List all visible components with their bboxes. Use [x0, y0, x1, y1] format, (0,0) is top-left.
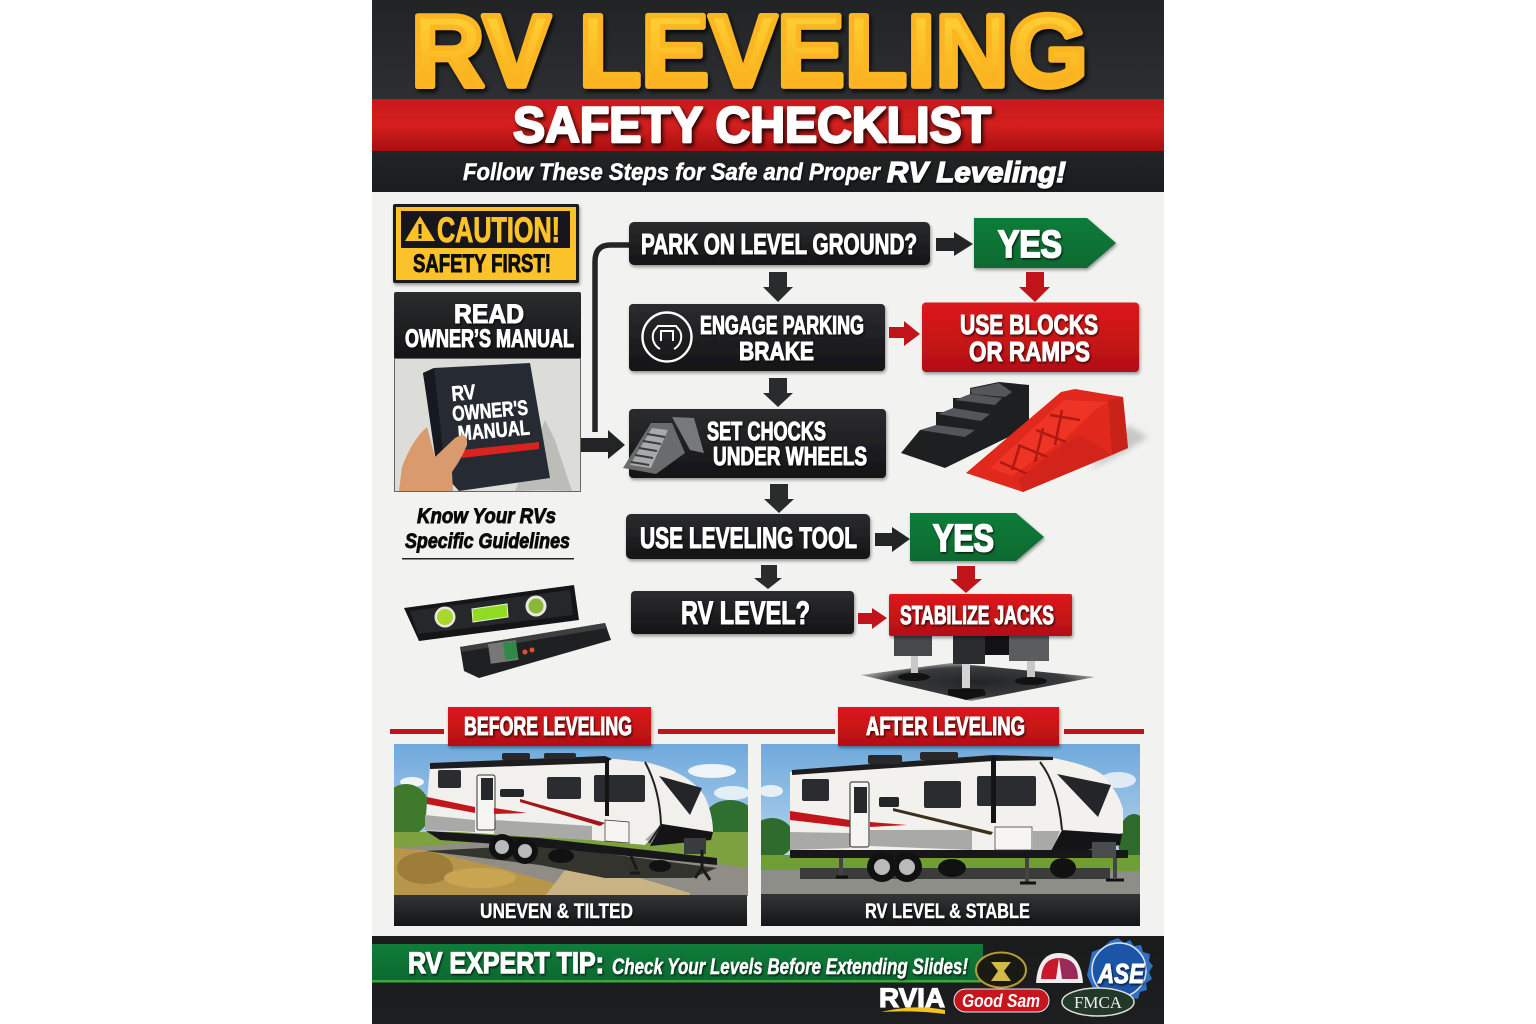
photo: scenery	[750, 744, 1150, 896]
step: use blocks or ramps	[922, 302, 1139, 372]
icon: manual book	[423, 363, 550, 491]
book title	[450, 377, 531, 446]
section rules	[390, 729, 1144, 734]
logo: FMCA	[1062, 988, 1134, 1016]
icon: hand	[399, 427, 467, 491]
guideline note	[402, 505, 574, 560]
label: after leveling	[838, 707, 1059, 746]
page background	[372, 190, 1164, 940]
logo: FMCA: FMCA	[1074, 993, 1123, 1012]
panel: after leveling	[750, 707, 1150, 926]
arrow: chocks down	[764, 484, 794, 513]
step: engage parking brake	[629, 304, 885, 371]
safety first text: SAFETY FIRST!	[413, 250, 551, 278]
step: engage parking brake: BRAKE	[739, 336, 814, 366]
icon: leveling blocks and ramp	[901, 382, 1148, 492]
badge: yes	[974, 218, 1116, 268]
connector: manual to flow	[581, 245, 630, 459]
red subtitle band	[372, 99, 1164, 151]
caution text: CAUTION!	[437, 211, 560, 250]
logo: gauge	[1036, 953, 1083, 983]
caption: RV LEVEL & STABLE	[865, 900, 1030, 923]
step: use blocks or ramps: USE BLOCKS	[960, 309, 1098, 340]
step: set chocks: SET CHOCKS	[707, 416, 826, 446]
tip banner: Check Your Levels Before Extending Slides!	[612, 954, 968, 979]
caption: UNEVEN & TILTED	[480, 900, 633, 923]
step: rv level: RV LEVEL?	[681, 595, 810, 631]
guideline note: Specific Guidelines	[405, 530, 570, 553]
badge: yes: YES	[933, 518, 994, 560]
subtitle: SAFETY CHECKLIST	[513, 97, 991, 153]
book title: MANUAL	[457, 416, 531, 446]
step: rv level	[631, 591, 854, 634]
label: before leveling: BEFORE LEVELING	[464, 711, 632, 741]
logo: ASE	[1087, 938, 1153, 1003]
icon: stabilizer jacks	[861, 636, 1095, 701]
icon: digital level	[460, 623, 611, 678]
arrow: yes down	[1019, 272, 1050, 302]
badge: yes	[910, 513, 1044, 561]
step: park on level ground: PARK ON LEVEL GROUND?	[641, 229, 917, 261]
badge: yes: YES	[998, 224, 1062, 266]
book title: RV	[451, 381, 476, 406]
illustration: tilted RV	[425, 753, 717, 880]
footer	[372, 936, 1164, 1024]
tagline: Follow These Steps for Safe and Proper	[463, 159, 882, 186]
photo: scenery	[382, 744, 756, 896]
arrow: level to jacks	[858, 608, 887, 629]
icon: parking brake	[642, 312, 692, 362]
step: use leveling tool: USE LEVELING TOOL	[640, 522, 857, 555]
infographic poster	[372, 0, 1164, 1024]
panel: before leveling	[382, 707, 756, 926]
logo: gold badge	[976, 952, 1026, 988]
tagline emphasis: RV Leveling!	[887, 157, 1066, 189]
arrow: brake to blocks	[889, 321, 920, 346]
icon: warning triangle	[405, 216, 435, 241]
heading: owner's manual: OWNER’S MANUAL	[405, 325, 574, 353]
arrow: park to yes	[936, 232, 973, 256]
arrow: park down	[763, 272, 793, 302]
caption bar	[394, 895, 747, 926]
illustration: level RV	[790, 752, 1128, 883]
logo: ASE: ASE	[1097, 958, 1145, 989]
heading: read: READ	[454, 299, 524, 329]
label: before leveling	[448, 707, 651, 746]
step: use leveling tool	[626, 514, 870, 559]
icon: wheel chocks	[623, 417, 704, 474]
guideline note: Know Your RVs	[417, 505, 556, 528]
step: set chocks	[623, 409, 886, 478]
arrow: yes down	[950, 566, 982, 593]
step: park on level ground	[629, 222, 930, 265]
logo: Good Sam: Good Sam	[962, 991, 1040, 1011]
header	[372, 0, 1164, 192]
book title: OWNER'S	[451, 396, 529, 426]
label: after leveling: AFTER LEVELING	[866, 711, 1025, 741]
step: stabilize jacks: STABILIZE JACKS	[900, 600, 1054, 630]
panel: read owner's manual	[394, 292, 581, 492]
red ramp	[966, 389, 1128, 492]
tip banner: RV EXPERT TIP:	[408, 947, 604, 980]
caption bar	[761, 894, 1140, 926]
arrow: tool to yes	[875, 527, 910, 552]
arrow: brake down	[763, 378, 793, 407]
step: engage parking brake: ENGAGE PARKING	[700, 310, 864, 340]
step: set chocks: UNDER WHEELS	[713, 441, 867, 471]
icon: spirit level	[404, 585, 579, 641]
tip banner	[372, 944, 983, 982]
caution sign	[393, 204, 579, 283]
step: stabilize jacks	[889, 594, 1072, 636]
step: use blocks or ramps: OR RAMPS	[969, 336, 1090, 367]
black step block	[901, 382, 1029, 468]
arrow: tool down	[754, 565, 782, 589]
logo: RVIA: RVIA	[879, 983, 945, 1013]
